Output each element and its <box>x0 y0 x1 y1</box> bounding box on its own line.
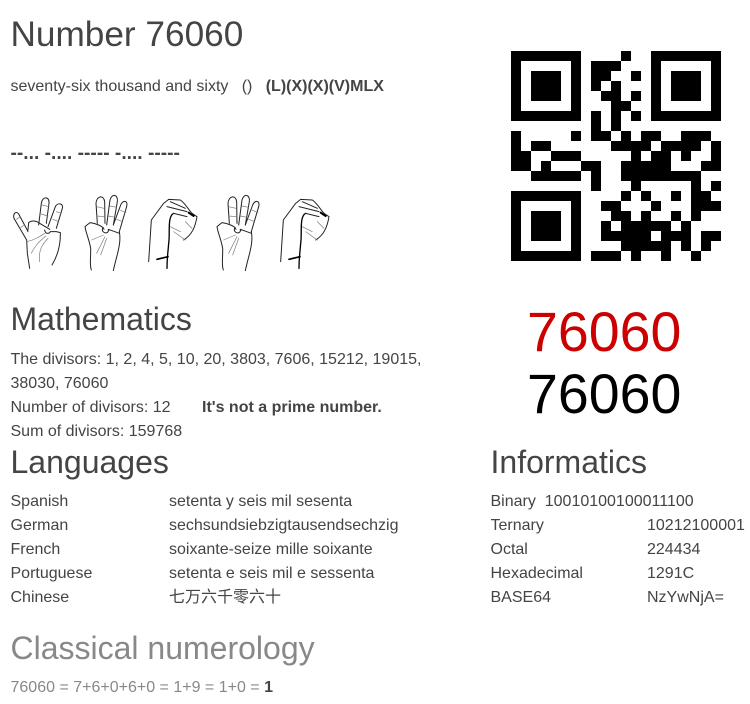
languages table <box>10 493 398 606</box>
languages table: Chinese <box>10 589 69 606</box>
sign language hands <box>13 194 330 272</box>
hand sign: digit 0 <box>281 199 329 268</box>
numerology formula: 76060 = 7+6+0+6+0 = 1+9 = 1+0 = 1 <box>10 679 273 696</box>
divisors text block <box>10 351 421 440</box>
number of divisors: Number of divisors: 12 <box>10 399 171 416</box>
informatics table: Hexadecimal <box>490 565 583 582</box>
heading: languages: Languages <box>10 444 169 480</box>
languages table: Spanish <box>10 493 68 510</box>
informatics table: Binary 10010100100011100 <box>490 493 694 510</box>
languages table: setenta y seis mil sesenta <box>169 493 352 510</box>
heading: mathematics: Mathematics <box>10 301 192 337</box>
hand sign: digit 6 <box>217 195 259 271</box>
heading: classical numerology: Classical numerology <box>10 630 315 666</box>
languages table: French <box>10 541 60 558</box>
informatics table: BASE64 <box>490 589 551 606</box>
informatics table: NzYwNjA= <box>647 589 724 606</box>
big black number: 76060 <box>527 363 681 425</box>
informatics table: 224434 <box>647 541 700 558</box>
QR code <box>511 51 721 261</box>
languages table: German <box>10 517 68 534</box>
languages table: soixante-seize mille soixante <box>169 541 373 558</box>
prime note: It's not a prime number. <box>202 399 382 416</box>
languages table: setenta e seis mil e sessenta <box>169 565 374 582</box>
morse code: --... -.... ----- -.... ----- <box>10 143 180 164</box>
sum of divisors: Sum of divisors: 159768 <box>10 423 182 440</box>
languages table: sechsundsiebzigtausendsechzig <box>169 517 398 534</box>
hand sign: digit 7 <box>14 198 63 268</box>
divisors list: The divisors: 1, 2, 4, 5, 10, 20, 3803, 7606, 15212, 19015, <box>10 351 421 368</box>
divisors list continued: 38030, 76060 <box>10 375 108 392</box>
heading: informatics: Informatics <box>490 444 647 480</box>
hand sign: digit 0 <box>149 199 197 268</box>
number in words and roman numerals: seventy-six thousand and sixty () (L)(X)(X)(V)MLX <box>10 78 384 95</box>
big red number: 76060 <box>527 301 681 363</box>
languages table: 七万六千零六十 <box>169 589 281 606</box>
hand sign: digit 6 <box>85 195 127 271</box>
informatics table: Ternary <box>490 517 544 534</box>
informatics table: 1291C <box>647 565 694 582</box>
informatics table: 10212100001 <box>647 517 745 534</box>
informatics table: Octal <box>490 541 528 558</box>
languages table: Portuguese <box>10 565 92 582</box>
informatics table <box>490 493 745 606</box>
title: Number 76060 <box>10 15 243 54</box>
